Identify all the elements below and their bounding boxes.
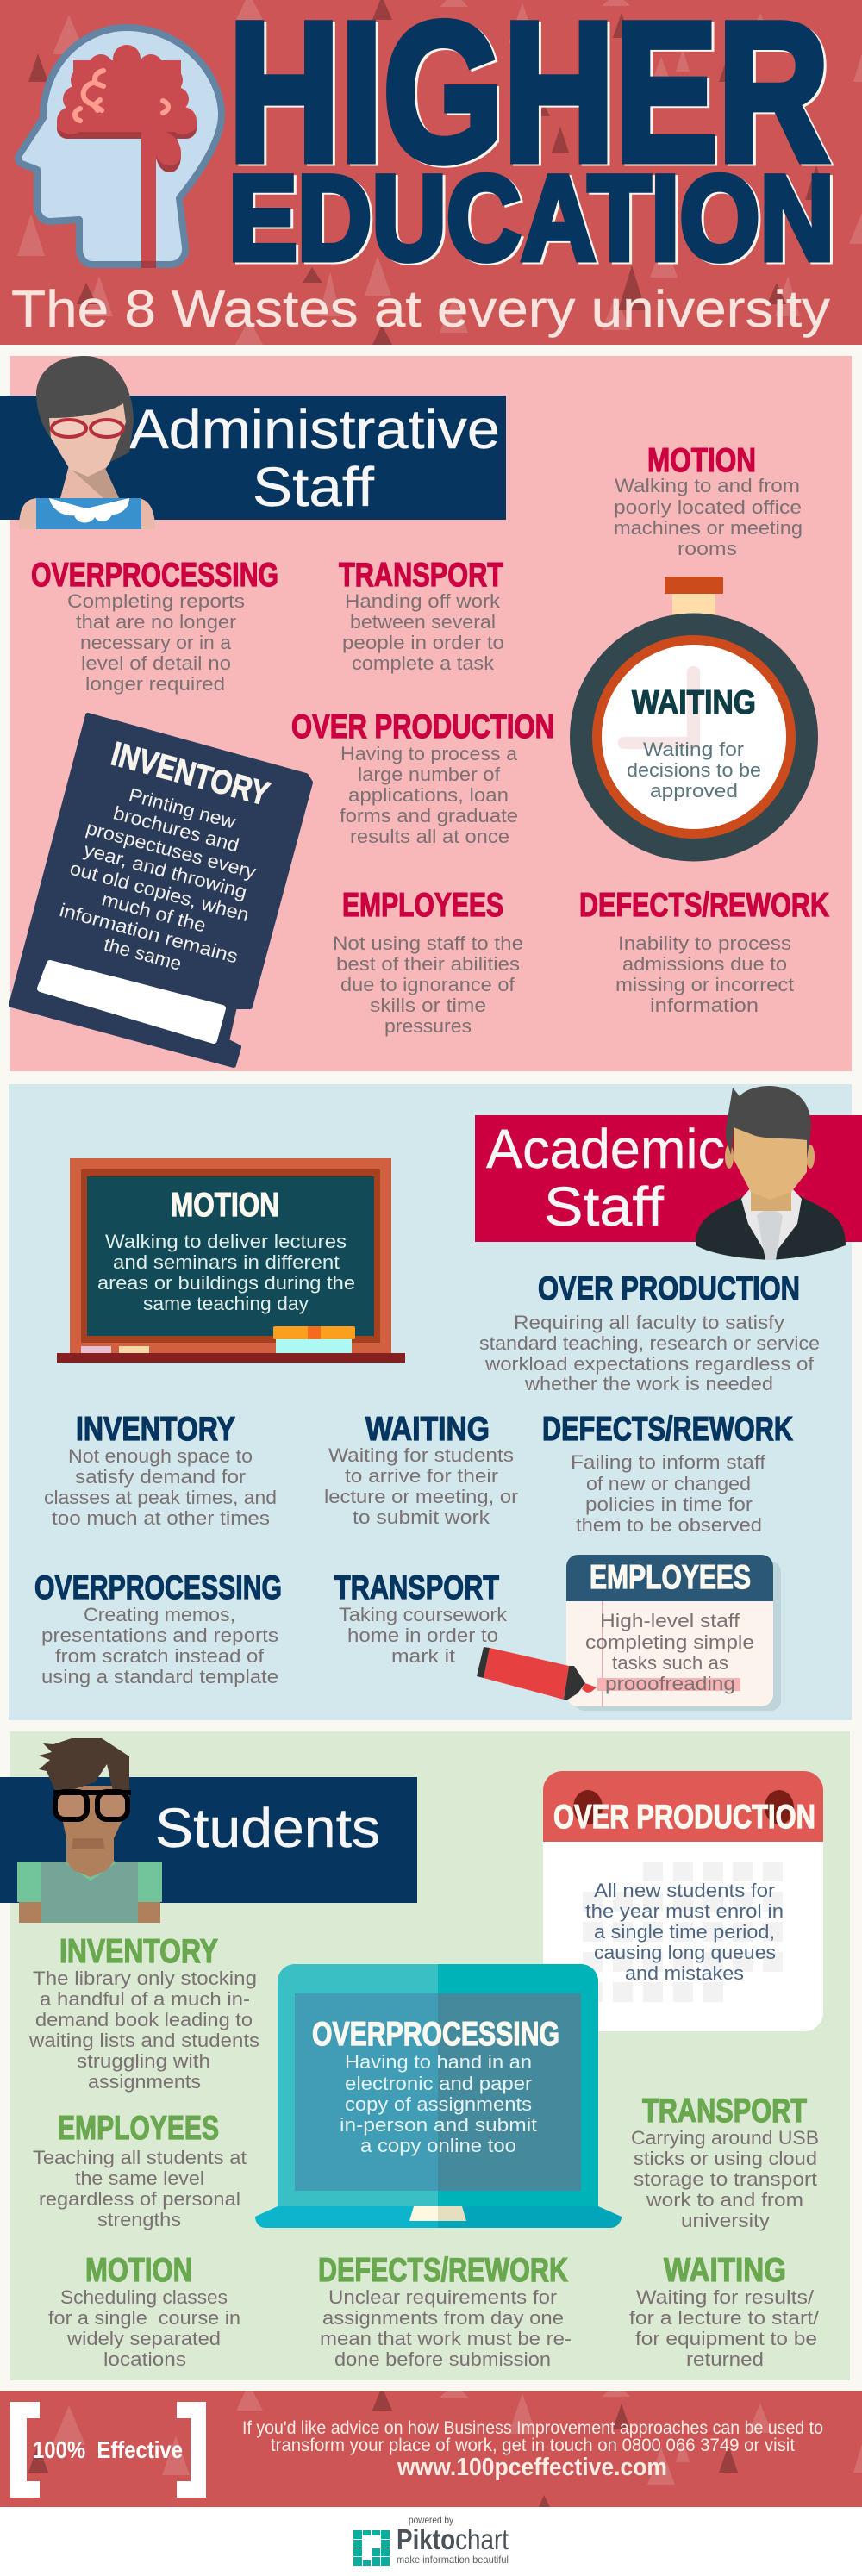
waste: employees: best of their abilities	[336, 953, 520, 975]
icon: laptop with overprocessing: electronic and paper	[345, 2073, 532, 2094]
icon: book with inventory: Printing new	[127, 783, 238, 833]
heading banner: Academic Staff: Staff	[544, 1176, 664, 1238]
waste: employees	[333, 887, 523, 1037]
waste: employees: due to ignorance of	[340, 974, 515, 995]
powered by footer strip: make information beautiful	[397, 2554, 509, 2566]
icon: book with inventory: INVENTORY	[108, 735, 273, 814]
waste: transport: complete a task	[352, 652, 495, 674]
icon: book with inventory: much of the	[99, 888, 209, 937]
waste: motion	[614, 442, 803, 559]
waste: overprocessing: OVERPROCESSING	[34, 1569, 282, 1606]
waste: motion: widely separated	[66, 2328, 221, 2349]
note card: employees	[566, 1555, 781, 1711]
waste: overprocessing: that are no longer	[76, 611, 236, 633]
waste: motion: machines or meeting	[614, 517, 803, 539]
waste: employees: Teaching all students at	[33, 2147, 247, 2168]
waste: motion: Scheduling classes	[60, 2286, 228, 2308]
waste: waiting: for a lecture to start/	[629, 2307, 820, 2329]
waste: transport: storage to transport	[634, 2168, 817, 2190]
icon: male academic	[696, 1086, 846, 1260]
waste: waiting: to submit work	[353, 1506, 490, 1528]
heading banner: Students: Students	[155, 1797, 380, 1859]
icon: book with inventory: out old copies, when	[67, 858, 252, 926]
waste: transport: Taking coursework	[339, 1604, 508, 1625]
icon: stopwatch with waiting: WAITING	[632, 684, 756, 721]
icon: book with inventory: year, and throwing	[82, 839, 249, 903]
icon: calendar with over production: a single time period,	[594, 1921, 775, 1943]
waste: defects/rework: assignments from day one	[322, 2307, 564, 2329]
waste: motion: poorly located office	[614, 496, 802, 518]
waste: overprocessing	[31, 557, 278, 695]
waste: transport: mark it	[391, 1645, 455, 1667]
icon: chalkboard with motion: and seminars in different	[113, 1251, 340, 1273]
logo: Piktochart squares	[353, 2530, 390, 2566]
waste: employees	[33, 2110, 247, 2230]
powered by footer strip	[0, 2507, 862, 2576]
waste: over production: Having to process a	[340, 743, 518, 764]
logo: 100% Effective bracket: 100% Effective	[33, 2436, 183, 2463]
waste: employees: pressures	[384, 1015, 472, 1037]
waste: over production: OVER PRODUCTION	[291, 708, 554, 745]
header panel	[0, 0, 862, 345]
waste: waiting: Waiting for students	[328, 1444, 514, 1466]
waste: employees: EMPLOYEES	[342, 887, 503, 924]
icon: laptop with overprocessing: in-person and submit	[340, 2114, 537, 2136]
waste: motion: MOTION	[647, 442, 756, 479]
panel: academic staff	[9, 1084, 862, 1720]
icon: calendar with over production: causing long queues	[594, 1942, 776, 1963]
icon: laptop with overprocessing: Having to hand in an	[345, 2051, 532, 2073]
icon: calendar with over production: All new students for	[594, 1880, 775, 1901]
waste: inventory	[28, 1933, 259, 2093]
waste: defects/rework: Inability to process	[618, 932, 791, 954]
waste: inventory: The library only stocking	[33, 1968, 257, 1989]
waste: over production: large number of	[358, 764, 501, 785]
waste: waiting: lecture or meeting, or	[324, 1486, 518, 1507]
waste: inventory: demand book leading to	[35, 2009, 253, 2030]
waste: motion: Walking to and from	[615, 475, 800, 496]
waste: overprocessing: longer required	[85, 673, 225, 695]
waste: employees: Not using staff to the	[333, 932, 523, 954]
icon: stopwatch with waiting	[570, 577, 818, 862]
waste: over production	[291, 708, 554, 847]
waste: defects/rework: missing or incorrect	[615, 974, 794, 995]
waste: inventory: INVENTORY	[59, 1933, 218, 1970]
waste: defects/rework: DEFECTS/REWORK	[318, 2252, 568, 2289]
waste: inventory: struggling with	[77, 2050, 210, 2072]
waste: transport: sticks or using cloud	[634, 2148, 817, 2169]
waste: transport: TRANSPORT	[334, 1569, 499, 1606]
icon: student with glasses	[17, 1738, 162, 1923]
waste: transport	[339, 557, 504, 674]
icon: head with brain	[18, 28, 222, 268]
logo: 100% Effective bracket	[10, 2402, 206, 2498]
waste: waiting	[629, 2252, 820, 2370]
icon: chalkboard with motion: Walking to deliver lectures	[105, 1231, 347, 1252]
waste: transport: work to and from	[646, 2189, 803, 2211]
waste: transport: home in order to	[347, 1625, 498, 1646]
waste: inventory: Not enough space to	[68, 1445, 253, 1467]
icon: chalkboard with motion	[57, 1158, 405, 1363]
waste: employees: strengths	[97, 2209, 181, 2230]
waste: defects/rework: done before submission	[334, 2348, 551, 2370]
waste: waiting: WAITING	[365, 1411, 490, 1448]
waste: defects/rework: information	[650, 995, 759, 1016]
waste: employees: the same level	[75, 2167, 204, 2189]
waste: defects/rework: Failing to inform staff	[571, 1451, 766, 1473]
panel: administrative staff	[0, 356, 852, 1071]
icon: book with inventory: prospectuses every	[84, 817, 259, 883]
icon: calendar with over production: and mistakes	[625, 1962, 744, 1984]
call to action text: www.100pceffective.com	[397, 2454, 667, 2481]
wordmark: Piktochart: Piktochart	[397, 2523, 509, 2555]
waste: defects/rework: mean that work must be re-	[320, 2328, 572, 2349]
icon: woman with glasses	[19, 356, 155, 529]
waste: inventory: waiting lists and students	[28, 2030, 259, 2051]
waste: overprocessing: Creating memos,	[84, 1604, 235, 1625]
waste: inventory: assignments	[88, 2071, 201, 2093]
waste: transport: people in order to	[342, 632, 504, 653]
waste: motion: MOTION	[85, 2252, 192, 2289]
waste: motion: for a single course in	[48, 2307, 240, 2329]
waste: transport: university	[681, 2210, 770, 2231]
waste: waiting: returned	[686, 2348, 764, 2370]
call to action text: transform your place of work, get in touch on 0800 066 3749 or visit	[271, 2436, 795, 2455]
icon: laptop with overprocessing	[255, 1964, 622, 2228]
waste: transport	[631, 2093, 819, 2231]
icon: highlighter	[477, 1647, 597, 1700]
waste: employees: EMPLOYEES	[58, 2110, 219, 2147]
heading banner: Administrative Staff: Staff	[253, 456, 374, 518]
waste: inventory: classes at peak times, and	[44, 1487, 277, 1508]
waste: defects/rework: DEFECTS/REWORK	[542, 1411, 793, 1448]
note card: employees: High-level staff	[600, 1610, 740, 1631]
waste: defects/rework: policies in time for	[585, 1494, 753, 1515]
waste: overprocessing	[34, 1569, 282, 1687]
waste: inventory: satisfy demand for	[75, 1466, 246, 1488]
heading banner: Administrative Staff	[0, 396, 506, 520]
footer panel	[0, 2391, 862, 2507]
icon: stopwatch with waiting: decisions to be	[627, 759, 761, 781]
icon: chalkboard with motion: MOTION	[171, 1187, 279, 1224]
waste: defects/rework: them to be observed	[576, 1514, 762, 1536]
icon: book with inventory: brochures and	[111, 801, 241, 856]
waste: waiting: Waiting for results/	[636, 2286, 815, 2308]
waste: transport: Carrying around USB	[631, 2127, 819, 2149]
waste: over production: OVER PRODUCTION	[538, 1270, 800, 1307]
waste: over production: results all at once	[350, 826, 509, 847]
waste: waiting	[324, 1411, 518, 1528]
note card: employees: prooofreading	[605, 1673, 735, 1694]
waste: transport: TRANSPORT	[339, 557, 503, 594]
icon: book with inventory	[11, 715, 310, 1065]
icon: calendar with over production: the year must enrol in	[585, 1900, 784, 1922]
waste: inventory	[44, 1411, 277, 1529]
waste: over production: standard teaching, research or service	[479, 1332, 820, 1354]
call to action text: If you'd like advice on how Business Improvement approaches can be used to	[242, 2418, 823, 2438]
icon: laptop with overprocessing: OVERPROCESSING	[312, 2016, 559, 2053]
waste: defects/rework: of new or changed	[586, 1473, 751, 1494]
icon: stopwatch with waiting: Waiting for	[643, 739, 744, 760]
powered by footer strip: powered by	[409, 2514, 453, 2526]
icon: chalkboard with motion: same teaching day	[143, 1293, 309, 1314]
waste: overprocessing: Completing reports	[67, 590, 245, 612]
waste: defects/rework	[579, 887, 829, 1016]
waste: inventory: too much at other times	[52, 1507, 270, 1529]
waste: over production: workload expectations regardless of	[484, 1353, 815, 1375]
waste: over production: whether the work is needed	[524, 1373, 773, 1394]
heading banner: Academic Staff: Academic	[486, 1118, 725, 1180]
waste: over production: forms and graduate	[340, 805, 518, 826]
waste: transport: between several	[350, 611, 496, 633]
waste: overprocessing: presentations and reports	[41, 1625, 278, 1646]
waste: inventory: a handful of a much in-	[40, 1988, 250, 2010]
icon: laptop with overprocessing: copy of assignments	[345, 2093, 532, 2115]
icon: calendar with over production	[543, 1771, 823, 2031]
icon: stopwatch with waiting: approved	[650, 780, 738, 801]
note card: employees: completing simple	[585, 1631, 754, 1653]
waste: defects/rework: Unclear requirements for	[328, 2286, 557, 2308]
waste: over production	[479, 1270, 820, 1394]
waste: motion	[48, 2252, 240, 2370]
waste: inventory: INVENTORY	[76, 1411, 235, 1448]
icon: book with inventory: the same	[102, 933, 184, 975]
waste: transport	[334, 1569, 508, 1667]
waste: waiting: to arrive for their	[345, 1465, 498, 1487]
icon: chalkboard with motion: areas or buildings during the	[97, 1272, 355, 1294]
waste: motion: locations	[103, 2348, 186, 2370]
waste: transport: TRANSPORT	[642, 2093, 807, 2130]
note card: employees: EMPLOYEES	[590, 1559, 751, 1596]
subtitle: The 8 Wastes at every university	[11, 280, 830, 338]
waste: overprocessing: OVERPROCESSING	[31, 557, 278, 594]
call to action text	[242, 2418, 823, 2481]
waste: over production: Requiring all faculty to satisfy	[514, 1312, 784, 1333]
icon: laptop with overprocessing: a copy online too	[360, 2135, 516, 2156]
waste: defects/rework	[318, 2252, 572, 2370]
waste: defects/rework: admissions due to	[622, 953, 787, 975]
note card: employees: tasks such as	[612, 1652, 728, 1674]
waste: waiting: for equipment to be	[635, 2328, 817, 2349]
heading banner: Administrative Staff: Administrative	[129, 398, 500, 460]
waste: overprocessing: using a standard template	[41, 1666, 278, 1687]
panel: students	[0, 1731, 850, 2380]
waste: over production: applications, loan	[348, 784, 509, 806]
heading banner: Academic Staff	[475, 1115, 862, 1242]
waste: transport: Handing off work	[345, 590, 501, 612]
waste: employees: skills or time	[370, 995, 486, 1016]
icon: book with inventory: information remains	[57, 899, 240, 967]
waste: overprocessing: from scratch instead of	[55, 1645, 265, 1667]
waste: waiting: WAITING	[664, 2252, 786, 2289]
waste: overprocessing: necessary or in a	[80, 632, 232, 653]
waste: overprocessing: level of detail no	[81, 652, 231, 674]
waste: defects/rework	[542, 1411, 793, 1536]
heading banner: Students	[0, 1777, 417, 1903]
waste: motion: rooms	[678, 538, 737, 559]
waste: employees: regardless of personal	[39, 2188, 240, 2210]
